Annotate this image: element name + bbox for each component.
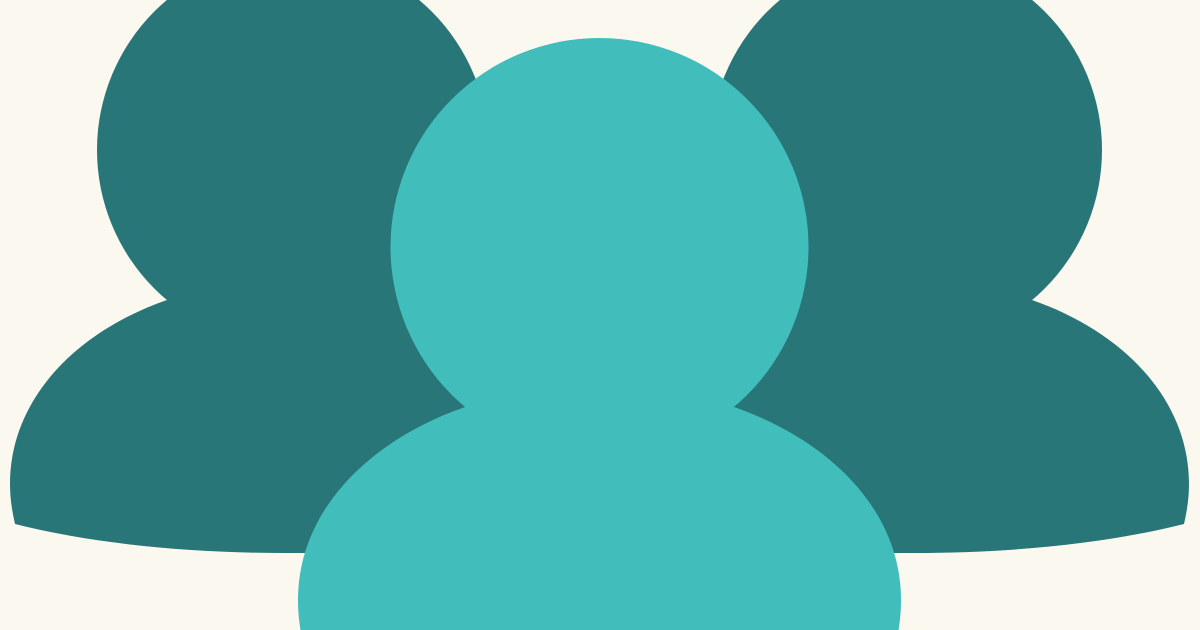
icon: center person (light teal)	[298, 38, 901, 630]
icon: left person (dark teal)	[10, 0, 600, 553]
icon: right person (dark teal)	[600, 0, 1189, 553]
